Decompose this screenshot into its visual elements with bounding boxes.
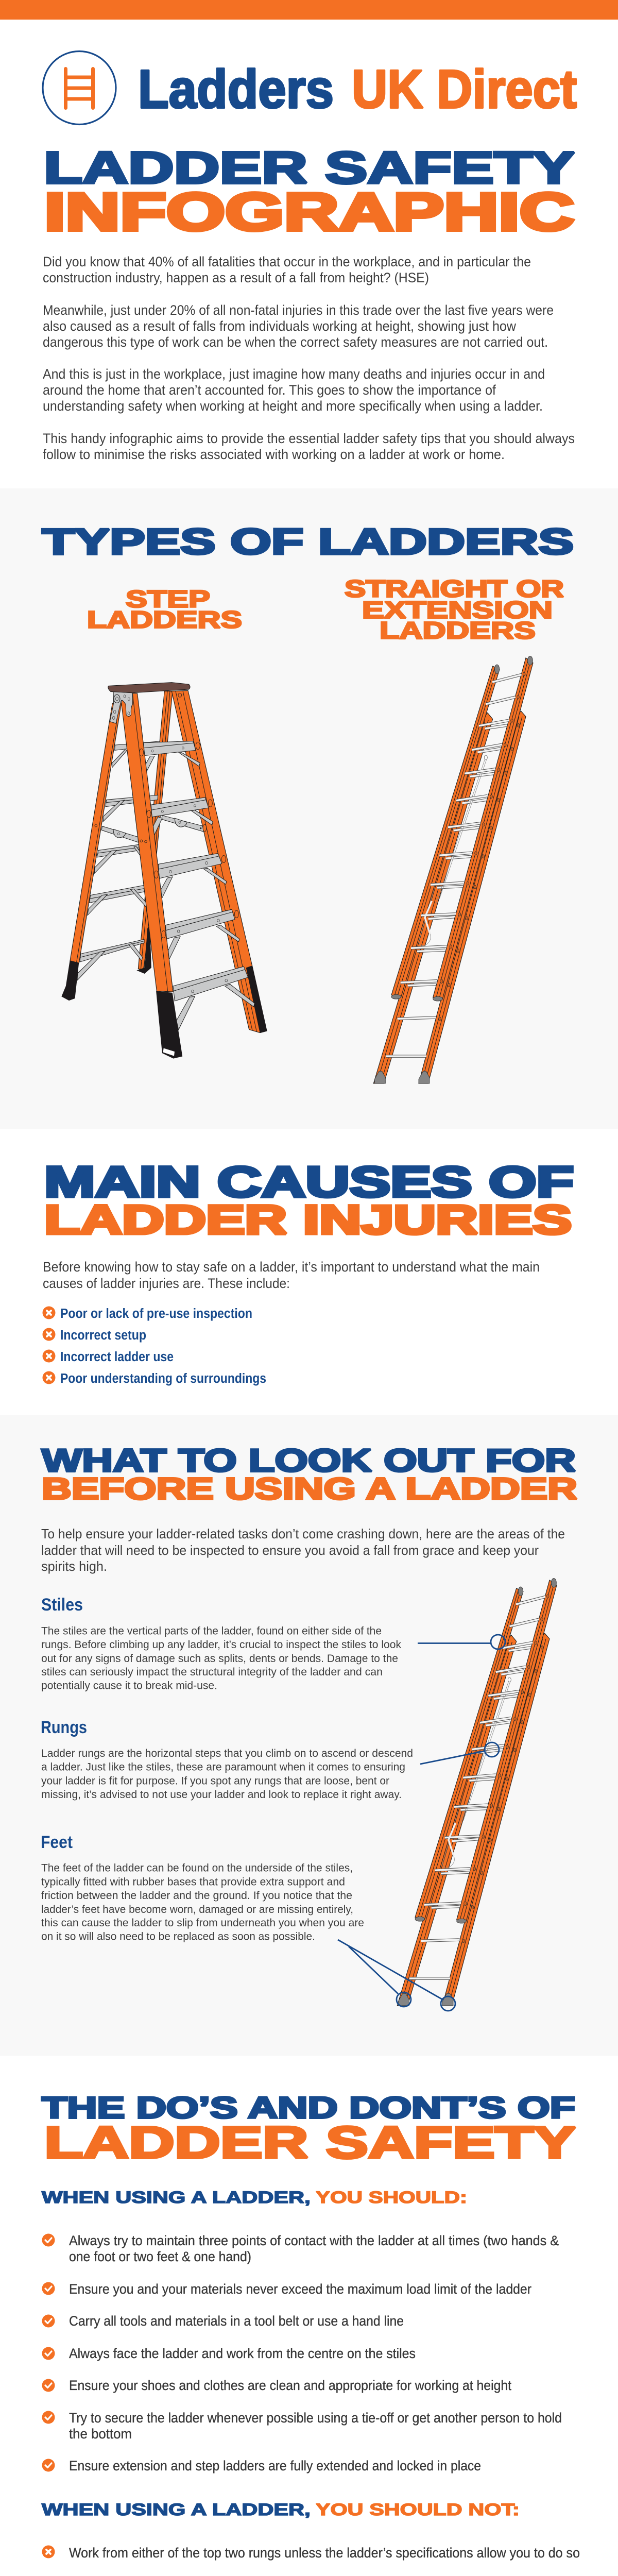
illustration: step ladder — [62, 683, 267, 1058]
causes intro text: causes of ladder injuries are. These include: — [43, 1276, 290, 1291]
subheading: you should: YOU SHOULD: — [316, 2188, 467, 2207]
intro text block: around the home that aren’t accounted for. This goes to show the importance of — [43, 382, 496, 398]
intro text block: construction industry, happen as a result of a fall from height? (HSE) — [43, 270, 429, 285]
intro text block: dangerous this type of work can be when the correct safety measures are not carried out. — [43, 334, 548, 350]
intro text block: understanding safety when working at height and more specifically when using a ladder. — [43, 398, 543, 414]
text block: feet: The feet of the ladder can be found on the underside of the stiles, — [41, 1862, 353, 1874]
do item 1: Always try to maintain three points of contact with the ladder at all times (two hands & — [69, 2233, 559, 2248]
intro text block — [43, 254, 575, 462]
text block: stiles: stiles can seriously impact the structural integrity of the ladder and can — [41, 1666, 383, 1678]
heading: what to look out for: WHAT TO LOOK OUT FOR — [42, 1443, 576, 1479]
cause 1: Poor or lack of pre-use inspection — [60, 1307, 252, 1321]
do item 6 — [42, 2410, 562, 2442]
heading: do's and don'ts: THE DO’S AND DONT’S OF — [42, 2091, 575, 2125]
heading: what to look out for — [42, 1443, 577, 1506]
don't item 1: Work from either of the top two rungs unless the ladder’s specifications allow you to do so — [69, 2545, 580, 2561]
heading: main causes: LADDER INJURIES — [44, 1197, 572, 1243]
do item 2: Ensure you and your materials never exceed the maximum load limit of the ladder — [69, 2281, 531, 2297]
do item 3: Carry all tools and materials in a tool belt or use a hand line — [69, 2313, 404, 2329]
panel: what to look out for — [0, 1415, 618, 2056]
top orange bar — [0, 0, 618, 20]
logo: Ladders UK Direct — [43, 52, 577, 125]
text block: feet: on it so will also need to be replaced as soon as possible. — [41, 1931, 315, 1943]
text block: stiles: rungs. Before climbing up any ladder, it’s crucial to inspect the stiles to look — [41, 1639, 401, 1651]
inspection intro text: spirits high. — [41, 1558, 107, 1574]
do item 6: Try to secure the ladder whenever possible using a tie-off or get another person to hold — [69, 2410, 562, 2426]
inspection intro text: To help ensure your ladder-related tasks don’t come crashing down, here are the areas of the — [41, 1526, 565, 1541]
inspection intro text — [41, 1526, 565, 1574]
intro text block: This handy infographic aims to provide the essential ladder safety tips that you should always — [43, 431, 575, 446]
text block: rungs: missing, it’s advised to not use your ladder and look to replace it right away. — [41, 1789, 402, 1801]
logo wordmark: Ladders — [138, 59, 334, 120]
text block: feet: Feet — [41, 1833, 73, 1852]
text block: stiles: out for any signs of damage such as splits, dents or bends. Damage to the — [41, 1653, 398, 1665]
heading: main causes — [44, 1157, 574, 1243]
heading: do's and don'ts: LADDER SAFETY — [44, 2117, 576, 2168]
intro text block: follow to minimise the risks associated with working on a ladder at work or home. — [43, 447, 505, 462]
text block: feet: ladder’s feet have become worn, damaged or are missing entirely, — [41, 1904, 353, 1916]
logo: Ladders UK Direct: UK Direct — [352, 59, 577, 120]
title — [44, 143, 575, 241]
label: step ladders: LADDERS — [87, 606, 242, 633]
text block: rungs — [41, 1718, 413, 1801]
do item 1 — [42, 2233, 559, 2264]
heading: do's and don'ts — [42, 2091, 576, 2168]
text block: stiles: Stiles — [41, 1595, 83, 1615]
label: step ladders: STEP — [126, 585, 210, 612]
text block: stiles — [41, 1595, 401, 1692]
subheading: you should not: WHEN USING A LADDER, — [42, 2500, 311, 2519]
label: straight or extension ladders: STRAIGHT OR — [345, 575, 564, 602]
title: LADDER SAFETY — [44, 143, 575, 193]
icon: ladder in a circle — [43, 52, 116, 125]
cause 2: Incorrect setup — [60, 1328, 146, 1343]
label: step ladders — [87, 585, 242, 633]
callout: feet — [338, 1940, 455, 2011]
do item 4: Always face the ladder and work from the centre on the stiles — [69, 2346, 416, 2361]
cause 3: Incorrect ladder use — [60, 1350, 174, 1364]
text block: feet: this can cause the ladder to slip from underneath you when you are — [41, 1917, 364, 1929]
cause 4: Poor understanding of surroundings — [60, 1371, 266, 1386]
title: INFOGRAPHIC — [44, 182, 574, 241]
callout: rungs — [420, 1742, 499, 1764]
subheading: you should not: YOU SHOULD NOT: — [316, 2500, 520, 2519]
intro text block: Did you know that 40% of all fatalities that occur in the workplace, and in particular the — [43, 254, 531, 269]
heading: main causes: MAIN CAUSES OF — [44, 1157, 574, 1206]
text block: feet — [41, 1833, 364, 1943]
illustration: extension ladder — [373, 656, 533, 1083]
do item 7: Ensure extension and step ladders are fully extended and locked in place — [69, 2458, 481, 2473]
illustration: annotated extension ladder — [397, 1579, 557, 2006]
heading: types of ladders: TYPES OF LADDERS — [42, 521, 574, 562]
text block: rungs: Ladder rungs are the horizontal steps that you climb on to ascend or descend — [41, 1748, 413, 1759]
panel: types of ladders — [0, 488, 618, 1129]
text block: feet: typically fitted with rubber bases that provide extra support and — [41, 1876, 345, 1888]
label: straight or extension ladders: EXTENSION — [362, 597, 553, 623]
do item 1: one foot or two feet & one hand) — [69, 2249, 251, 2264]
intro text block: And this is just in the workplace, just imagine how many deaths and injuries occur in and — [43, 366, 545, 382]
panel: main causes of ladder injuries — [42, 1157, 574, 1386]
text block: rungs: your ladder is fit for purpose. If you spot any rungs that are loose, bent or — [41, 1775, 389, 1787]
do item 6: the bottom — [69, 2426, 132, 2442]
text block: feet: friction between the ladder and the ground. If you notice that the — [41, 1890, 352, 1902]
list: causes — [42, 1307, 266, 1386]
text block: rungs: a ladder. Just like the stiles, these are paramount when it comes to ensuring — [41, 1761, 405, 1773]
text block: rungs: Rungs — [41, 1718, 87, 1737]
callout: stiles — [418, 1635, 505, 1649]
list: things you should do — [42, 2233, 562, 2473]
intro text block: also caused as a result of falls from individuals working at height, showing just how — [43, 318, 516, 334]
subheading: you should — [42, 2188, 467, 2207]
label: straight or extension ladders: LADDERS — [380, 617, 536, 644]
intro text block: Meanwhile, just under 20% of all non-fatal injuries in this trade over the last five years were — [43, 302, 554, 318]
subheading: you should: WHEN USING A LADDER, — [42, 2188, 311, 2207]
causes intro text — [43, 1259, 540, 1291]
causes intro text: Before knowing how to stay safe on a ladder, it’s important to understand what the main — [43, 1259, 540, 1275]
heading: what to look out for: BEFORE USING A LADDER — [42, 1471, 577, 1506]
label: straight or extension ladders — [345, 575, 564, 644]
subheading: you should not — [42, 2500, 520, 2519]
panel: do's and don'ts — [42, 2091, 580, 2576]
list: things you should not do — [42, 2545, 580, 2576]
text block: stiles: The stiles are the vertical parts of the ladder, found on either side of the — [41, 1625, 382, 1637]
inspection intro text: ladder that will need to be inspected to ensure you avoid a fall from grace and keep your — [41, 1543, 539, 1558]
text block: stiles: potentially cause it to break mid-use. — [41, 1680, 217, 1692]
do item 5: Ensure your shoes and clothes are clean and appropriate for working at height — [69, 2378, 512, 2393]
